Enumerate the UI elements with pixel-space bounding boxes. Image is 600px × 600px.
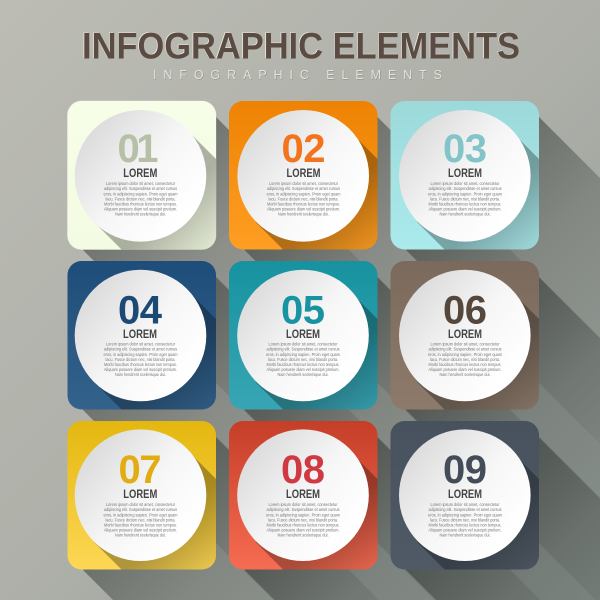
card 07 bbox=[68, 421, 216, 570]
card 03 bbox=[390, 101, 539, 250]
card 07: lacu. Fusce dictum nec, nisi blandit porta. bbox=[106, 517, 176, 522]
card 06: adipiscing elit. Suspendisse et amet cursus bbox=[428, 347, 502, 352]
card 07: 07 bbox=[118, 448, 162, 492]
card 05: lacu. Fusce dictum nec, nisi blandit porta. bbox=[268, 357, 338, 362]
card 01: LOREM bbox=[123, 168, 157, 180]
card 02: Lorem ipsum dolor sit amet, consectetur bbox=[269, 181, 339, 186]
card 03: Lorem ipsum dolor sit amet, consectetur bbox=[430, 181, 500, 186]
card 05: 05 bbox=[281, 288, 325, 332]
card 01: lacu. Fusce dictum nec, nisi blandit porta. bbox=[106, 196, 176, 201]
card 08: Nam hendrerit scelerisque dui. bbox=[278, 533, 328, 538]
card 08: Lorem ipsum dolor sit amet, consectetur bbox=[268, 502, 338, 507]
card 03: Morbi faucibus rhoncus lectus non tempus. bbox=[428, 202, 502, 206]
card 09: LOREM bbox=[448, 489, 482, 501]
card 07: adipiscing elit. Suspendisse et amet cursus bbox=[104, 507, 177, 512]
card 05: LOREM bbox=[286, 329, 320, 341]
card 04: Lorem ipsum dolor sit amet, consectetur bbox=[106, 342, 176, 346]
card 05 bbox=[229, 261, 378, 410]
card 05: Lorem ipsum dolor sit amet, consectetur bbox=[268, 342, 338, 346]
card 03: Aliquam posuere diam vel suscipit pretium. bbox=[428, 207, 502, 212]
card 04: LOREM bbox=[123, 329, 157, 341]
card 07: Aliquam posuere diam vel suscipit pretium. bbox=[104, 528, 177, 533]
card 04: Morbi faucibus rhoncus lectus non tempus. bbox=[104, 362, 177, 367]
card 01: adipiscing elit. Suspendisse et amet cursus bbox=[104, 186, 177, 191]
card 04: Nam hendrerit scelerisque dui. bbox=[115, 372, 166, 377]
card 02: Nam hendrerit scelerisque dui. bbox=[278, 212, 329, 217]
card 03: eros, in adipiscing sapien. Proin eget quam bbox=[428, 191, 502, 196]
card 04: 04 bbox=[118, 288, 163, 332]
card 09 bbox=[390, 421, 539, 570]
card 01: Lorem ipsum dolor sit amet, consectetur bbox=[106, 181, 176, 186]
card 06 bbox=[390, 261, 539, 410]
title: INFOGRAPHIC ELEMENTS bbox=[81, 24, 519, 66]
card 04: lacu. Fusce dictum nec, nisi blandit porta. bbox=[106, 357, 176, 362]
card 02 bbox=[229, 101, 378, 250]
card 06: Aliquam posuere diam vel suscipit pretium. bbox=[428, 367, 502, 372]
card 03: lacu. Fusce dictum nec, nisi blandit porta. bbox=[430, 196, 500, 201]
card 02: lacu. Fusce dictum nec, nisi blandit porta. bbox=[268, 196, 338, 201]
card 06: 06 bbox=[443, 288, 487, 332]
card 06: Nam hendrerit scelerisque dui. bbox=[440, 372, 490, 377]
card 03: Nam hendrerit scelerisque dui. bbox=[440, 212, 490, 217]
card 02: LOREM bbox=[286, 168, 320, 180]
card 09: Lorem ipsum dolor sit amet, consectetur bbox=[430, 502, 500, 507]
card 07: Morbi faucibus rhoncus lectus non tempus. bbox=[104, 522, 177, 528]
card 07: LOREM bbox=[123, 489, 157, 501]
card 05: Nam hendrerit scelerisque dui. bbox=[278, 372, 328, 377]
card 05: adipiscing elit. Suspendisse et amet cursus bbox=[266, 347, 340, 352]
card 04: eros, in adipiscing sapien. Proin eget quam bbox=[104, 352, 178, 357]
card 07: Lorem ipsum dolor sit amet, consectetur bbox=[106, 502, 176, 507]
card 03: adipiscing elit. Suspendisse et amet cursus bbox=[428, 186, 502, 191]
card 06: LOREM bbox=[448, 329, 482, 341]
subtitle: INFOGRAPHIC ELEMENTS bbox=[154, 68, 442, 82]
card 02: eros, in adipiscing sapien. Proin eget quam bbox=[266, 191, 341, 196]
card 04: Aliquam posuere diam vel suscipit pretium. bbox=[104, 367, 177, 372]
card 05: eros, in adipiscing sapien. Proin eget quam bbox=[266, 352, 340, 357]
card 09: lacu. Fusce dictum nec, nisi blandit porta. bbox=[430, 517, 500, 522]
card 02: adipiscing elit. Suspendisse et amet cursus bbox=[267, 186, 340, 191]
card 01: Nam hendrerit scelerisque dui. bbox=[115, 212, 166, 217]
card 05: Aliquam posuere diam vel suscipit pretium. bbox=[266, 367, 340, 372]
card 09: Nam hendrerit scelerisque dui. bbox=[440, 533, 490, 538]
card 01: Morbi faucibus rhoncus lectus non tempus. bbox=[104, 202, 177, 206]
card 09: eros, in adipiscing sapien. Proin eget quam bbox=[428, 512, 502, 517]
card 09: adipiscing elit. Suspendisse et amet cursus bbox=[428, 507, 502, 512]
title: INFOGRAPHIC ELEMENTS bbox=[82, 24, 520, 66]
card 06: Morbi faucibus rhoncus lectus non tempus. bbox=[428, 362, 502, 367]
long shadows behind cards bbox=[83, 117, 600, 600]
card 08: adipiscing elit. Suspendisse et amet cursus bbox=[266, 507, 340, 512]
card 01 bbox=[68, 101, 216, 250]
card 02: Aliquam posuere diam vel suscipit pretium. bbox=[267, 207, 340, 212]
card 05: Morbi faucibus rhoncus lectus non tempus. bbox=[266, 362, 340, 367]
card 06: lacu. Fusce dictum nec, nisi blandit porta. bbox=[430, 357, 500, 362]
card 09: Morbi faucibus rhoncus lectus non tempus. bbox=[428, 522, 502, 528]
card 08: Morbi faucibus rhoncus lectus non tempus. bbox=[266, 522, 340, 528]
card 08: LOREM bbox=[286, 489, 320, 501]
card 04 bbox=[68, 261, 216, 410]
card 06: eros, in adipiscing sapien. Proin eget quam bbox=[428, 352, 502, 357]
card 02: Morbi faucibus rhoncus lectus non tempus. bbox=[267, 202, 340, 206]
card 08: 08 bbox=[281, 448, 325, 492]
card 07: eros, in adipiscing sapien. Proin eget quam bbox=[104, 512, 178, 517]
card 08: lacu. Fusce dictum nec, nisi blandit porta. bbox=[268, 517, 338, 522]
card 03: 03 bbox=[443, 127, 487, 171]
card 01: 01 bbox=[118, 127, 158, 171]
card 07: Nam hendrerit scelerisque dui. bbox=[115, 533, 166, 538]
card 01: Aliquam posuere diam vel suscipit pretium. bbox=[104, 207, 177, 212]
subtitle: INFOGRAPHIC ELEMENTS bbox=[153, 68, 442, 82]
card 06: Lorem ipsum dolor sit amet, consectetur bbox=[430, 342, 500, 346]
card 03: LOREM bbox=[448, 168, 482, 180]
card 08 bbox=[229, 421, 378, 570]
card 01: eros, in adipiscing sapien. Proin eget quam bbox=[104, 191, 178, 196]
card 02: 02 bbox=[282, 127, 326, 171]
card 04: adipiscing elit. Suspendisse et amet cursus bbox=[104, 347, 177, 352]
card 08: Aliquam posuere diam vel suscipit pretium. bbox=[266, 528, 340, 533]
card 08: eros, in adipiscing sapien. Proin eget quam bbox=[266, 512, 340, 517]
card 09: Aliquam posuere diam vel suscipit pretium. bbox=[428, 528, 502, 533]
card 09: 09 bbox=[443, 448, 487, 492]
